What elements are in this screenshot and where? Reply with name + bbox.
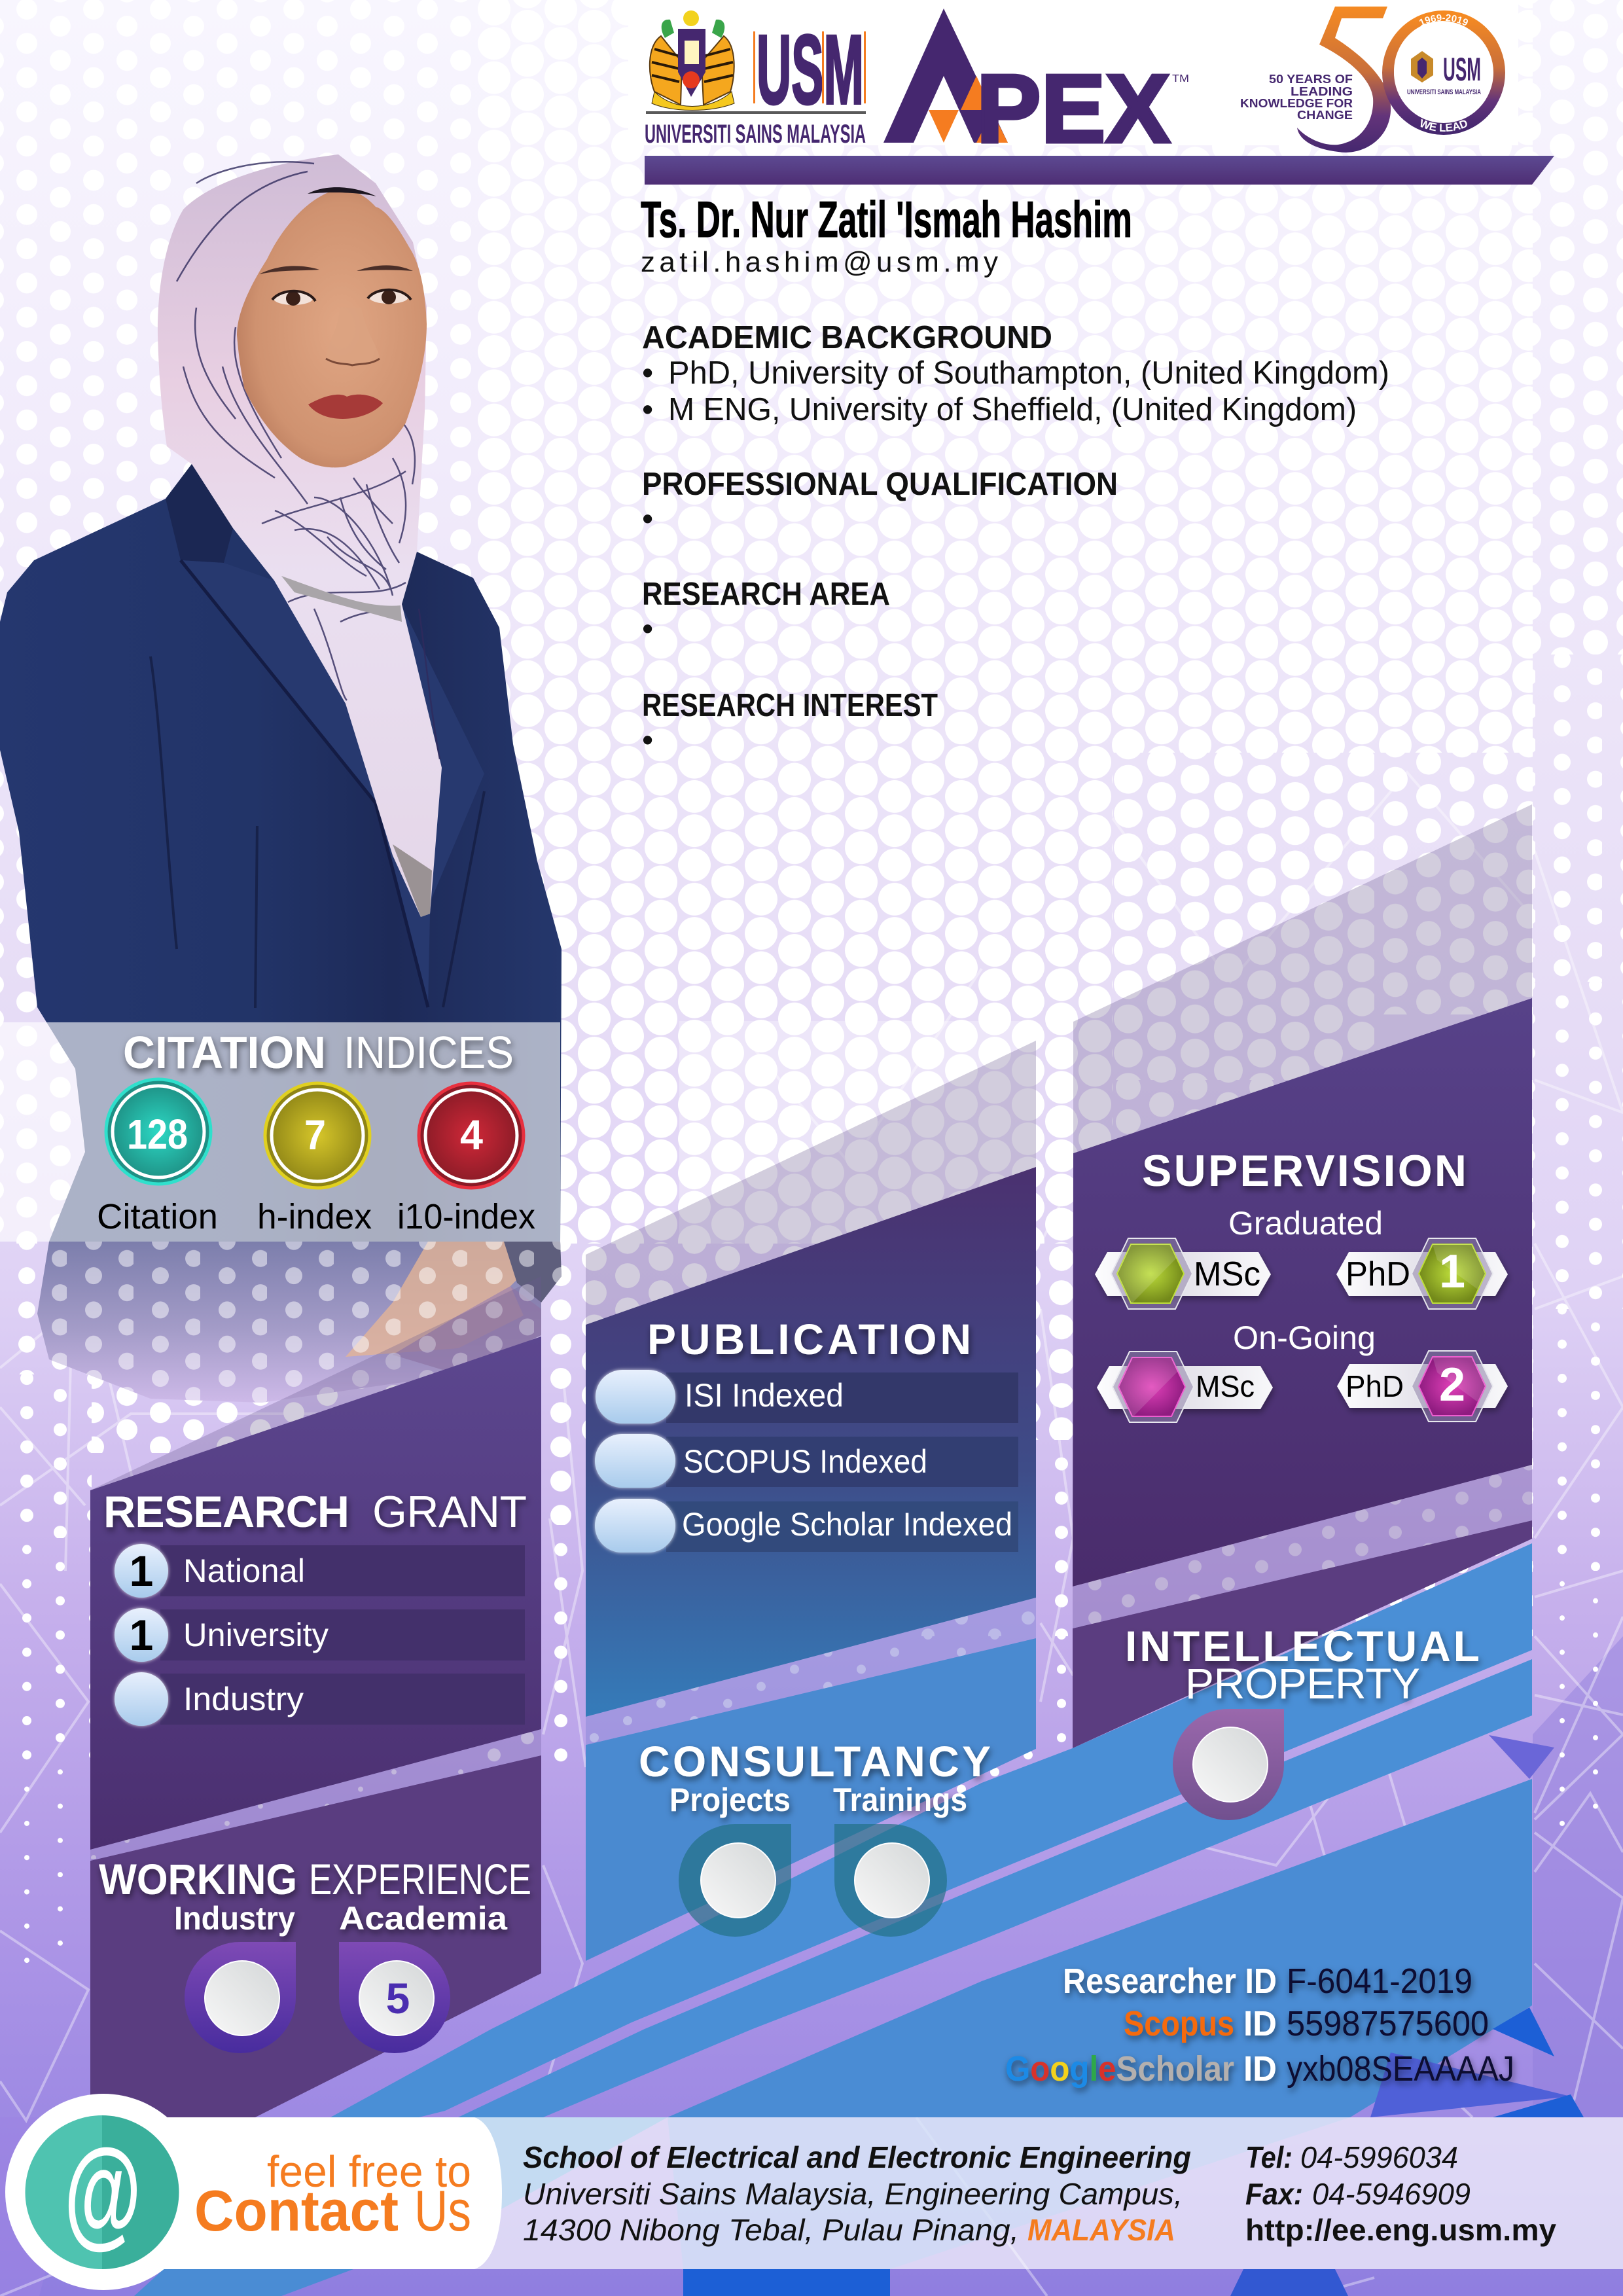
research interest: • — [642, 723, 653, 758]
footer band — [5, 2094, 1623, 2290]
badge: graduated PhD: PhD — [1346, 1255, 1410, 1293]
school address: Universiti Sains Malaysia, Engineering Campus, — [523, 2177, 1183, 2211]
row: national — [115, 1544, 525, 1598]
portrait photo of the academic — [0, 154, 562, 1242]
logo: APEX: PEX — [976, 55, 1170, 163]
logo: USM 50 years: USM — [1443, 51, 1481, 88]
heading: research grant: GRANT — [372, 1487, 527, 1537]
header logos — [645, 7, 1505, 163]
badge: on-going PhD: 2 — [1439, 1359, 1465, 1411]
contact us pill: feel free to — [267, 2147, 471, 2197]
row: university: 1 — [130, 1611, 153, 1659]
heading: working experience: Academia — [339, 1900, 508, 1937]
panel: publication and consultancy — [586, 1041, 1036, 1961]
row: national: National — [183, 1552, 305, 1589]
label: graduated: Graduated — [1228, 1205, 1383, 1242]
researcher id: Researcher ID — [1063, 1962, 1277, 2001]
logo: USM wordmark: USM — [757, 14, 864, 124]
heading: publication: PUBLICATION — [647, 1315, 971, 1363]
badge: citation 128: 128 — [127, 1111, 188, 1158]
logo: USM 50 years: LEADING — [1291, 85, 1353, 98]
panel: citation indices — [0, 1022, 560, 1242]
phone, fax and website: Fax: — [1245, 2177, 1303, 2211]
scopus id — [1124, 2004, 1489, 2043]
label: on-going: On-Going — [1233, 1319, 1376, 1356]
row: SCOPUS indexed: SCOPUS Indexed — [683, 1443, 927, 1480]
badge: industry experience — [185, 1942, 296, 2053]
researcher identifiers — [1005, 1962, 1514, 2089]
row: industry: Industry — [183, 1681, 304, 1717]
contact us pill: Contact — [194, 2178, 399, 2243]
scopus id: ID — [1243, 2004, 1277, 2043]
google scholar id: ID — [1243, 2049, 1277, 2089]
heading: consultancy: Trainings — [833, 1782, 967, 1818]
badge: on-going MSc: MSc — [1196, 1369, 1255, 1403]
logo: USM 50 years — [1240, 7, 1505, 152]
logo: APEX — [883, 9, 1189, 163]
lower body fade — [37, 1242, 562, 1403]
heading: intellectual property — [1125, 1622, 1480, 1708]
labels: citation metrics: i10-index — [397, 1197, 535, 1236]
badge: academia experience: 5 — [386, 1974, 410, 2022]
researcher id: F-6041-2019 — [1287, 1962, 1472, 2001]
research interest: RESEARCH INTEREST — [642, 688, 938, 723]
badge: graduated PhD: 1 — [1439, 1246, 1465, 1298]
heading: working experience: EXPERIENCE — [309, 1855, 531, 1903]
contact us pill: @ — [64, 2125, 141, 2259]
scopus id: 55987575600 — [1287, 2004, 1489, 2043]
badge: graduated MSc — [1095, 1238, 1271, 1309]
academic background — [642, 320, 1389, 427]
panel: supervision and intellectual property — [1073, 804, 1532, 1820]
google scholar id: yxb08SEAAAAJ — [1287, 2049, 1514, 2089]
heading: intellectual property: PROPERTY — [1185, 1659, 1420, 1708]
research area: • — [642, 611, 653, 647]
badge: i10-index 4: 4 — [460, 1111, 483, 1158]
professional qualification: PROFESSIONAL QUALIFICATION — [642, 467, 1118, 502]
school address: School of Electrical and Electronic Engineering — [523, 2140, 1191, 2174]
professional qualification: • — [642, 501, 653, 537]
badge: citation 128 — [106, 1079, 211, 1184]
profile details — [642, 320, 1389, 758]
logo: USM 50 years: WE LEAD — [1420, 119, 1467, 132]
heading: working experience: Industry — [174, 1900, 295, 1937]
professional qualification — [642, 467, 1118, 537]
row: university: University — [183, 1617, 329, 1653]
logo: APEX: TM — [1172, 73, 1189, 84]
phone, fax and website: 04-5946909 — [1312, 2177, 1471, 2211]
badge: on-going PhD: PhD — [1346, 1369, 1404, 1403]
row: university — [115, 1608, 525, 1662]
header bar — [645, 156, 1554, 185]
phone, fax and website: 04-5996034 — [1300, 2140, 1458, 2174]
heading: research grant — [103, 1487, 527, 1537]
name and email: Ts. Dr. Nur Zatil 'Ismah Hashim — [641, 190, 1132, 248]
badge: consultancy trainings — [834, 1824, 947, 1937]
row: industry — [115, 1672, 525, 1726]
row: google scholar indexed: Google Scholar Indexed — [682, 1506, 1012, 1543]
badge: h-index 7 — [265, 1083, 370, 1188]
logo: USM crest — [650, 10, 734, 110]
heading: citation indices: CITATION — [123, 1027, 326, 1078]
logo: USM 50 years: KNOWLEDGE FOR — [1240, 97, 1353, 110]
academic background: M ENG, University of Sheffield, (United Kingdom) — [668, 392, 1357, 427]
academic background: • — [642, 355, 653, 391]
phone, fax and website: Tel: — [1245, 2140, 1293, 2174]
row: SCOPUS indexed — [595, 1434, 1018, 1488]
heading: consultancy: CONSULTANCY — [639, 1737, 991, 1785]
google scholar id: GoogleScholar — [1005, 2049, 1234, 2089]
google scholar id — [1005, 2049, 1514, 2089]
logo: USM wordmark: UNIVERSITI SAINS MALAYSIA — [645, 120, 866, 149]
researcher id — [1063, 1962, 1472, 2001]
school address: MALAYSIA — [1027, 2213, 1175, 2247]
heading: supervision: SUPERVISION — [1142, 1146, 1467, 1196]
row: national: 1 — [130, 1547, 153, 1595]
badge: intellectual property — [1173, 1709, 1284, 1820]
row: ISI indexed: ISI Indexed — [685, 1377, 844, 1414]
heading: consultancy: Projects — [669, 1782, 791, 1818]
phone, fax and website: http://ee.eng.usm.my — [1245, 2213, 1556, 2247]
school address — [523, 2140, 1191, 2247]
heading: citation indices — [123, 1027, 514, 1078]
name and email: zatil.hashim@usm.my — [641, 246, 998, 278]
row: ISI indexed — [596, 1370, 1018, 1424]
logo: USM 50 years: 1969-2019 — [1419, 14, 1468, 26]
heading: working experience — [99, 1855, 531, 1937]
academic background: • — [642, 392, 653, 427]
badge: on-going PhD — [1337, 1351, 1508, 1422]
blue diagonal bands — [134, 1543, 1584, 2296]
scopus id: Scopus — [1124, 2004, 1234, 2043]
badge: i10-index 4 — [419, 1083, 524, 1188]
heading: research grant: RESEARCH — [103, 1487, 349, 1537]
logo: USM 50 years: 50 YEARS OF — [1269, 73, 1353, 86]
heading: intellectual property: INTELLECTUAL — [1125, 1622, 1480, 1670]
phone, fax and website — [1245, 2140, 1556, 2247]
labels: citation metrics: h-index — [257, 1197, 372, 1236]
heading: working experience: WORKING — [99, 1855, 297, 1903]
badge: h-index 7: 7 — [304, 1111, 326, 1158]
labels: citation metrics — [97, 1197, 535, 1236]
academic background: PhD, University of Southampton, (United Kingdom) — [668, 355, 1389, 391]
face — [237, 189, 427, 467]
eyes, brows, nose and lips — [259, 265, 413, 274]
heading: consultancy — [639, 1737, 991, 1818]
panel: research grant and working experience — [90, 1276, 541, 2121]
labels: citation metrics: Citation — [97, 1197, 218, 1236]
row: google scholar indexed — [595, 1499, 1018, 1552]
white logo backing — [628, 0, 1518, 145]
badge: consultancy projects — [679, 1824, 791, 1937]
scarf — [158, 154, 442, 917]
academic background: ACADEMIC BACKGROUND — [642, 320, 1052, 355]
contact us pill — [5, 2094, 502, 2290]
school address: 14300 Nibong Tebal, Pulau Pinang, — [523, 2213, 1019, 2247]
badge: graduated PhD — [1336, 1238, 1508, 1309]
jacket — [0, 464, 562, 1242]
heading: citation indices: INDICES — [344, 1027, 514, 1078]
logo: USM 50 years: UNIVERSITI SAINS MALAYSIA — [1407, 88, 1481, 96]
research area — [642, 577, 890, 647]
contact us pill: Us — [414, 2178, 471, 2243]
research area: RESEARCH AREA — [642, 577, 890, 612]
badge: academia experience — [339, 1942, 450, 2053]
research interest — [642, 688, 938, 758]
badge: graduated MSc: MSc — [1194, 1255, 1260, 1293]
name and email — [641, 190, 1132, 278]
logo: USM 50 years: CHANGE — [1297, 109, 1353, 122]
logo: USM wordmark — [645, 14, 866, 149]
badge: on-going MSc — [1097, 1352, 1273, 1422]
